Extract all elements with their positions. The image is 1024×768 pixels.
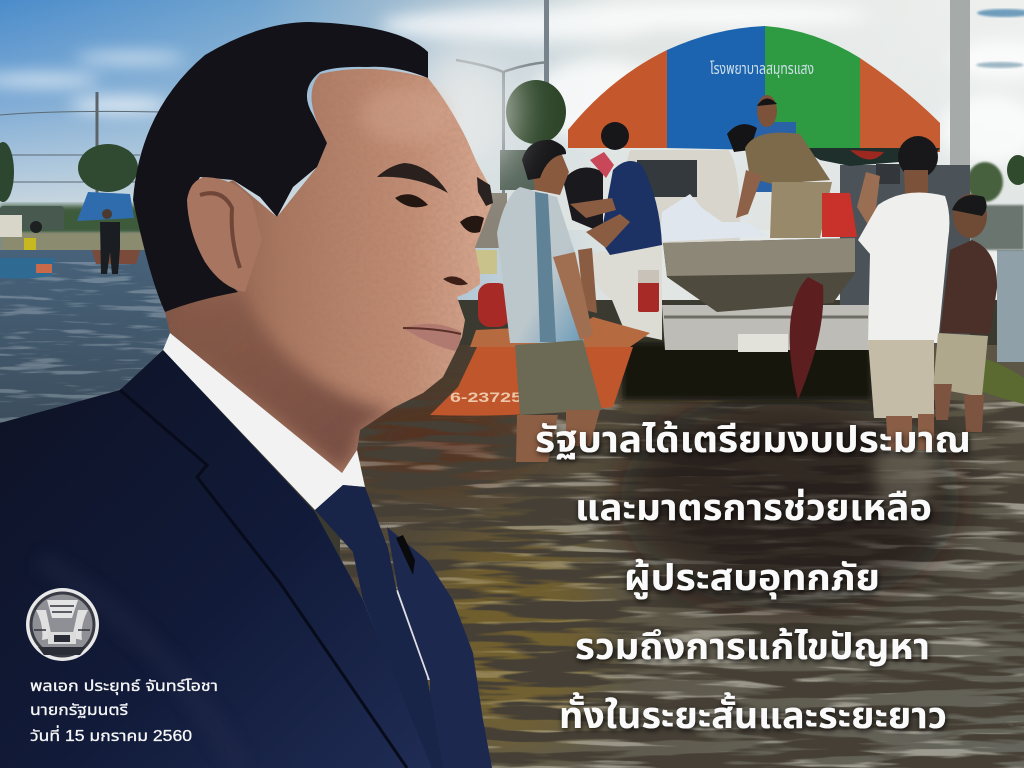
left suit panel <box>0 350 433 768</box>
forehead highlight <box>360 87 450 143</box>
eyebrows <box>377 163 448 193</box>
red cloth <box>790 277 823 400</box>
shirt front <box>313 512 430 680</box>
seal of the Prime Minister's office <box>26 588 99 661</box>
boat number text: 6-23725 <box>450 389 522 405</box>
tie knot and blade <box>315 485 443 768</box>
worker in olive shirt bending over bags <box>727 95 857 238</box>
background: street lamp, palm and concrete pole <box>456 0 1024 345</box>
neck and jaw shading <box>196 293 393 472</box>
date: วันที่ 15 มกราคม 2560 <box>30 725 192 745</box>
aid workers standing around the truck <box>497 95 997 462</box>
position: นายกรัฐมนตรี <box>30 702 128 719</box>
portrait of the prime minister in dark suit <box>0 22 495 768</box>
worker in striped shirt <box>497 140 602 462</box>
lapel edges <box>120 390 407 768</box>
bed <box>587 246 662 340</box>
hair <box>133 22 428 312</box>
man in white shirt filming with a camera <box>857 136 949 450</box>
right lapel and shoulder <box>387 527 492 768</box>
main headline message <box>535 419 971 736</box>
line 1: รัฐบาลได้เตรียมงบประมาณ <box>535 419 971 460</box>
suit folds <box>40 560 240 768</box>
background: flood water at left <box>0 209 200 430</box>
lips <box>403 324 461 351</box>
background: sky and clouds <box>0 0 1024 300</box>
line 5: ทั้งในระยะสั้นและระยะยาว <box>559 691 947 736</box>
line 4: รวมถึงการแก้ไขปัญหา <box>575 626 930 667</box>
lapel pin <box>396 535 415 575</box>
colored canopy tent <box>568 26 940 166</box>
nostril <box>443 276 468 285</box>
worker in navy shirt <box>563 122 662 313</box>
ear <box>187 177 262 292</box>
line 3: ผู้ประสบอุทกภัย <box>624 557 880 599</box>
skin texture <box>446 130 488 314</box>
collar <box>163 333 365 510</box>
cab <box>615 150 740 245</box>
neck and face skin <box>165 69 492 473</box>
orange boat with lettering <box>430 193 650 416</box>
line 2: และมาตรการช่วยเหลือ <box>575 487 932 528</box>
background: flood water at right <box>340 250 1024 768</box>
tent lettering: โรงพยาบาลสมุทรแสง <box>710 61 814 78</box>
tailgate <box>662 305 870 350</box>
background: distant treeline, tent and boats at left <box>0 92 170 290</box>
boat on truck <box>663 238 855 312</box>
shadow under truck <box>622 342 872 400</box>
name: พลเอก ประยุทธ์ จันทร์โอชา <box>30 678 218 695</box>
boy in brown T-shirt <box>933 194 997 432</box>
signature block <box>30 678 218 745</box>
eyes <box>395 194 428 207</box>
relief bags <box>660 194 770 242</box>
soft white glow behind the head <box>415 45 515 175</box>
pickup truck with boat and relief bags <box>587 150 872 400</box>
